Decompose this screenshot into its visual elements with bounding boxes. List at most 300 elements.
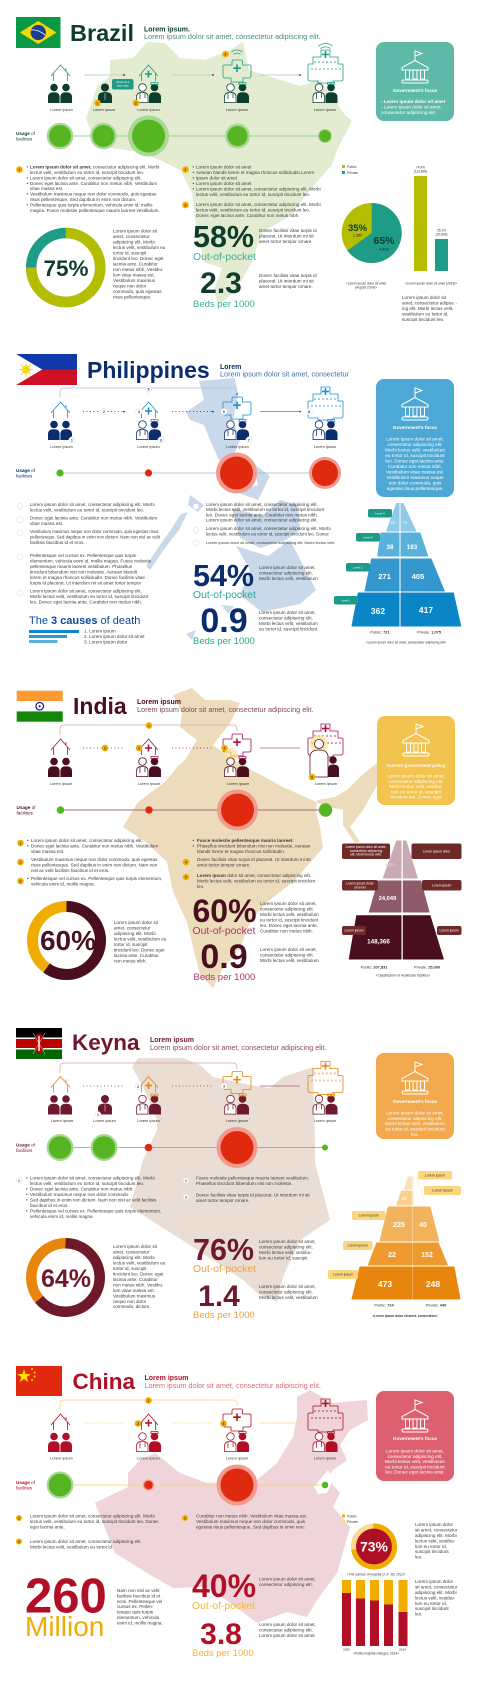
icon labels: Lorem ipsum [137, 107, 160, 112]
text block: notes 4-5: dolor sit amet, consectetur adipiscing elit. [227, 873, 311, 878]
title: Philippines: Philippines [87, 357, 210, 383]
text block: notes 1: Pellentesque vel cursus ex. Pellentesque quis turpis elementum, [30, 1208, 161, 1214]
panel: government focus: Lorem ipsum dolor sit amet, [386, 436, 444, 442]
icon labels: Lorem ipsum [137, 1456, 160, 1460]
text block: notes 6-8: Lorem ipsum dolor sit amet, consectetur adipiscing elit. [206, 518, 318, 522]
text block: notes 6-8: lectus velit, vestibulum eu tortor id, suscipit tincidunt leo. Donec [206, 532, 330, 536]
text: stat notes: Lorem ipsum dolor sit amet, [259, 565, 316, 570]
heading: 3 causes of death: The 3 causes of death [29, 615, 140, 627]
pyramid chart: 417 [419, 605, 433, 615]
panel: government policy: Current government policy [387, 763, 446, 768]
icon labels: Lorem ipsum [314, 444, 336, 449]
text: stat notes: Lorem ipsum dolor sit amet, [259, 1239, 316, 1244]
text block: notes 1-3: 2 [20, 860, 22, 864]
stat: 3.8 beds: Beds per 1000 [192, 1648, 254, 1659]
usage chart [46, 1464, 328, 1506]
pyramid captions [372, 1302, 446, 1318]
text: 260 million note: elementum, vehicula [117, 1615, 160, 1620]
text: donut note: lum vitae massa est. [113, 1288, 155, 1293]
badge numbers: 2 [137, 1085, 139, 1089]
text block: notes 1: • [26, 181, 28, 186]
level tags: Level 3 [363, 536, 373, 540]
text block: notes 2 and 3: Donec eget lacinia ante. Curabitur non metus nibh. [196, 213, 299, 218]
stat: 54%: Out-of-pocket [193, 590, 256, 601]
text block: notes 2 and 3: • [192, 164, 194, 170]
text block: notes 6-8: Lorem ipsum dolor sit amet, consectetur adipiscing elit. Morbi [206, 526, 331, 531]
text block: notes 1: • [26, 1192, 28, 1197]
subtitle: Lorem ipsum dolor sit amet, consectetur adipiscing elit. [144, 32, 320, 41]
text: stat notes: placerat. Ut interdum mi sit [259, 234, 314, 238]
text: stat notes: lum eu tortor id, suscipit [259, 1256, 308, 1260]
panel: government focus: consectetur adipiscing elit. [388, 1116, 442, 1121]
text: stat notes: Morbi lectus velit, vestibulum [260, 958, 319, 963]
text: chart notes: Lorem ipsum dolor [415, 1522, 453, 1527]
badges: 2 [135, 101, 137, 105]
text: stat notes: Donec facilisis vitae turpis id [259, 228, 317, 233]
bar chart: 25.1% [437, 228, 446, 232]
pyramid chart: 362 [371, 606, 385, 616]
text block: note 3: Curabitur non metus nibh. Vestibulum vitae massa est. [196, 1514, 307, 1518]
panel: government focus: - Lorem ipsum dolor sit amet, [381, 104, 442, 110]
pyramid captions: <Lorem ipsum dolor sit amet, consectetur> [372, 1314, 438, 1318]
icon: door-step health worker: door step [117, 84, 129, 88]
panel: government focus: Vestibulum maximus neque [386, 475, 444, 480]
text block: notes 2-3: 3 [185, 1195, 187, 1199]
text: stat notes: Lorem ipsum dolor sit amet, [259, 610, 316, 615]
text: stat notes: Donec facilisis vitae turpis id [259, 273, 317, 278]
panel: government focus: consectetur adipiscing elit [381, 110, 435, 115]
text block: notes 1: • [26, 1198, 28, 1202]
text block: notes 1-3: Lorem ipsum dolor sit amet, consectetur adipiscing elit. [31, 838, 143, 843]
icon: clinic [223, 1409, 251, 1452]
icon: home [48, 1076, 72, 1114]
panel: government focus: leo. Donec eget lacinia ante. [385, 458, 445, 464]
icon labels: Lorem ipsum [314, 1456, 336, 1460]
usage chart [47, 116, 332, 156]
text: stat notes: consectetur adipiscing elit. [259, 1290, 313, 1294]
badge numbers: 7 [248, 438, 250, 442]
text: donut note: adipiscing elit. Morbi [113, 1255, 155, 1260]
text block: notes 6-8: Lorem ipsum dolor sit amet, consectetur adipiscing elit. Morbi lectus velit, [206, 540, 335, 545]
text block: notes 1-5 [17, 502, 161, 604]
text block: notes 2 and 3: 3 [185, 203, 187, 207]
pie chart: 2,380 [353, 234, 362, 238]
icon labels: Lorem ipsum [93, 1118, 116, 1123]
icon labels: Lorem ipsum [138, 781, 160, 786]
text: chart note: vestibulum eu tortor id, [402, 312, 448, 316]
text block: notes 2-3: Donec facilisis vitae turpis id placerat. Ut interdum mi sit [196, 1192, 310, 1198]
pyramid tags: elit. Morbi lectus velit. [350, 853, 382, 857]
text block: notes 1 [16, 1176, 161, 1219]
subtitle: Lorem ipsum [144, 1375, 188, 1382]
badge numbers: 1 [71, 438, 73, 442]
text: chart notes: adipiscing elit. Morbi [415, 1590, 457, 1595]
panel: government focus: Morbi lectus velit, vestibulum [385, 1459, 445, 1464]
title: Brazil: Brazil [70, 20, 134, 46]
pyramid tags: Lorem ipsum [333, 1272, 353, 1276]
text block: notes 1-2: Lorem ipsum dolor sit amet, consectetur adipiscing elit. [30, 1539, 142, 1544]
caption: hospitals: <The number of hospital (J. K. W), 2012> [347, 1572, 405, 1576]
text block: notes 1-5: pellentesque. Sed dapibus in enim non dictum. Nam non nisl ac velit [30, 534, 161, 540]
panel: government focus: Morbi lectus velit, vestibulum [385, 448, 445, 452]
text block: notes 1-3: • [27, 844, 29, 848]
text block: notes 1: Donec eget lacinia ante. Curabitur non metus nibh. [30, 1186, 133, 1192]
text: stat notes: Lorem ipsum dolor sit amet. [259, 1633, 316, 1638]
arrows [84, 74, 301, 76]
text block: notes 6-8: Lorem ipsum dolor sit amet, consectetur adipiscing elit. [206, 502, 318, 507]
text block: notes 1-5: lorem et magna rhoncus sollicitudin. Donec facilisis vitae [30, 575, 145, 580]
text block: notes 6-8: leo. Donec eget lacinia ante. Curabitur non metus nibh. [206, 512, 318, 518]
text block: notes 1-3: 1 [20, 841, 22, 845]
stat: 60%: 60% [192, 893, 257, 929]
title: India: India [73, 693, 127, 719]
map: Philippines [146, 378, 316, 640]
usage of facilities: Usage of [16, 1480, 35, 1485]
map: Brazil [86, 42, 352, 306]
stat: 0.9 beds: Beds per 1000 [193, 636, 255, 647]
usage of facilities: facilities [16, 1486, 33, 1490]
text block: notes 1: vitae massa est. [30, 186, 63, 191]
badges: 5 [311, 775, 313, 779]
stat: 0.9 beds [193, 602, 255, 647]
text block: notes 1-3: Vestibulum maximus neque non dolor commodo, quis egestas [31, 857, 158, 862]
icon labels: Lorem ipsum [50, 107, 73, 112]
text block: notes 1: risus pellentesque. Sed dapibus in enim non dictum. [30, 197, 136, 202]
badge numbers: 1 [97, 1113, 99, 1117]
icon: hospital [308, 1399, 343, 1452]
text block: notes 1: • [26, 202, 28, 208]
text: chart notes: suscipit tincidunt [415, 1549, 449, 1554]
text: donut note: Vestibulum maximus [113, 278, 156, 283]
pyramid chart: 40 [419, 1222, 427, 1229]
text block: notes 1-3: 3 [20, 879, 22, 883]
badges [69, 386, 312, 443]
panel: government focus: eu tortor id, suscipit tincidunt [385, 453, 445, 458]
text: stat notes: Morbi lectus velit, vestibulum [259, 621, 318, 626]
icon labels: Lorem ipsum [93, 107, 115, 112]
icon: home [48, 1414, 72, 1452]
text: donut note: non metus nibh. Vestibu- [113, 1282, 164, 1288]
stat: 260 Million: Million [25, 1611, 104, 1642]
text block: notes 1-3: risus pellentesque. Sed dapibus in enim non dictum. Nam non [31, 862, 158, 868]
text block: notes 2-3: Fusce molestie pellentesque mauris laoreet vestibulum. [196, 1176, 309, 1180]
title: China: China [72, 1369, 135, 1394]
text block: notes 4-5: 4 [185, 860, 187, 864]
text: donut note: neque non dolor [113, 1299, 147, 1304]
text: donut note: commodo, dictum. [113, 1304, 151, 1309]
text: stat notes: leo. Donec eget lacinia ante. [260, 923, 318, 928]
chart captions: <Lorem ipsum dolor sit amet (2014)> [405, 282, 457, 286]
text block: notes 1-3: vehicula enim id, mollis magna. [31, 882, 95, 886]
panel: government focus: Government's focus [393, 1099, 438, 1104]
icon labels: Lorem ipsum [314, 1118, 336, 1123]
icon: clinic [223, 397, 251, 440]
pyramid chart: 50 [390, 520, 396, 525]
text block: notes 2 and 3: lectus velit, vestibulum eu tortor id, suscipit tincidunt leo. [196, 192, 310, 197]
section: Brazil [16, 17, 457, 322]
text block: notes 2 and 3: • [192, 186, 194, 192]
bar chart: (113,893) [414, 170, 427, 174]
arrows [60, 1400, 300, 1423]
text block: notes 4-5: 5 [185, 875, 187, 879]
text block: notes 1: Vestibulum maximus neque non dolor commodo. [30, 1192, 129, 1197]
text: donut note: adipiscing elit. Morbi [113, 240, 155, 244]
badge numbers: 2 [103, 410, 105, 414]
usage of facilities: Usage of [16, 131, 35, 136]
text block: notes 2-3 [183, 1176, 310, 1203]
stat: 58%: Out-of-pocket [193, 252, 256, 263]
text: donut note: tortor id, suscipit [113, 250, 147, 256]
text: chart note: Lorem ipsum dolor sit [402, 295, 446, 300]
panel: government focus: Morbi lectus velit, vestibulum [385, 1121, 445, 1126]
pyramid tags: Lorem ipsum [359, 1214, 379, 1218]
pyramid tags: Lorem ipsum dolor [423, 850, 451, 854]
badges: 1 [97, 101, 99, 105]
text block: notes 1-5: Lorem ipsum dolor sit amet, consectetur adipiscing elit. Morbi [30, 502, 155, 507]
badge numbers: 6 [223, 410, 225, 414]
pyramid captions: Private: 25,000 [414, 964, 440, 970]
text block: notes 2 and 3: Lorem ipsum dolor sit amet [196, 164, 252, 170]
arrows [60, 1063, 300, 1086]
donut: 73% [354, 1526, 394, 1567]
icon labels: Lorem ipsum [226, 1118, 248, 1123]
text block: notes 2 and 3: Lorem ipsum dolor sit amet [196, 181, 252, 186]
pyramid tags: Lorem ipsum [439, 928, 459, 932]
text block: notes 4-5: Morbi lectus velit, vestibulum eu tortor id, suscipit tincidunt [197, 878, 316, 884]
text block: notes 1-3: Donec eget lacinia ante. Curabitur non metus nibh. Vestibulum [31, 844, 158, 848]
icon: door-step worker [98, 1095, 112, 1114]
arrows [60, 725, 300, 748]
usage chart [46, 1127, 328, 1168]
text: donut note: lum vitae massa est. [113, 272, 155, 278]
panel: government focus: Government's focus [393, 88, 438, 93]
text block: notes 1-2: lectus velit, vestibulum eu tortor id, suscipit tincidunt leo. Donec [30, 1519, 159, 1524]
text block: notes 1-5: lectus velit, vestibulum eu tortor id, suscipit tincidunt leo. [30, 508, 144, 512]
flag: Keyna [16, 1028, 62, 1059]
usage of facilities: Usage of [16, 805, 35, 810]
text block: note 3 [182, 1514, 307, 1530]
icon labels [51, 1118, 336, 1123]
text block: notes 1: magna. Fusce molestie pellentesque mauris laoreet vestibulum. [30, 208, 160, 213]
text: stat notes: Morbi lectus velit, vestibulum [260, 912, 319, 917]
text: 260 million note: eros. Pellentesque vel [117, 1599, 162, 1604]
legend: Public [347, 1514, 357, 1518]
text block: notes 1: Vestibulum maximus neque non dolor commodo, quis egestas [30, 192, 157, 196]
icon: clinic house [136, 739, 161, 777]
pyramid chart: 148,366 [367, 938, 390, 946]
pyramid chart: 271 [378, 572, 391, 581]
usage of facilities: Usage of [16, 468, 35, 473]
icon: home [48, 65, 72, 103]
stat: 40%: 40% [192, 1568, 256, 1604]
pyramid tags: Lorem ipsum dolor [346, 882, 375, 886]
text block: notes 2-3: amet tortor tempor ornare. [196, 1198, 250, 1203]
stacked bar chart: <Public hospital changes, 2014> [353, 1652, 399, 1656]
pyramid tags: sit amet [354, 885, 366, 889]
text block: notes 1-5: Donec eget lacinia ante. Curabitur non metus nibh. Vestibulum [30, 516, 157, 520]
stat: 60%: Out-of-pocket [192, 926, 256, 937]
panel: government focus: egestas risus pellentesque. [387, 486, 443, 491]
pyramid chart: 70 [402, 520, 408, 525]
text: donut note: risus pellentesque. [113, 294, 151, 300]
text: chart notes: lectus velit, vestibu- [415, 1538, 456, 1544]
chart captions: <Lorem ipsum dolor sit amet [346, 282, 386, 286]
text block: notes 4-5: Donec facilisis vitae turpis id placerat. Ut interdum mi sit [197, 857, 311, 862]
panel: government focus: Lorem ipsum dolor sit amet, [386, 1110, 444, 1116]
causes bars [29, 628, 145, 644]
text: chart notes: adipiscing elit. Morbi [415, 1533, 457, 1538]
text block: notes 1-5: Morbi lectus velit, vestibulum eu tortor id, suscipit tincidunt [30, 594, 149, 599]
icon: door-step health worker: Serve at a [116, 80, 130, 84]
text: stat notes: Lorem ipsum dolor sit amet, [260, 947, 317, 952]
flag: Philippines [16, 354, 77, 385]
text block: notes 1-2: Morbi lectus velit, vestibulum eu tortor id. [30, 1544, 113, 1550]
badge numbers: 3 [223, 1084, 225, 1088]
icon: hospital [308, 1062, 343, 1114]
text: chart notes: lectus velit, vestibu- [415, 1596, 456, 1600]
text block: notes 1-5: elementum, vehicula enim id, mollis magna. Fusce molestie [30, 558, 152, 564]
icon: home [48, 739, 72, 777]
icon: clinic house [136, 1414, 161, 1452]
text: donut note: lacinia ante. Curabitur [113, 262, 158, 266]
text: stat notes: consectetur adipiscing elit. [259, 1244, 313, 1250]
text block: notes 2 and 3: 2 [185, 168, 187, 172]
text: stat notes: consectetur adipiscing elit. [260, 906, 314, 912]
panel: government focus: Government's focus [393, 1436, 438, 1441]
panel: government policy: Lorem ipsum dolor sit amet, [387, 774, 445, 778]
text: donut note: non metus nibh. [114, 958, 147, 964]
text block: notes 1: Lorem ipsum dolor sit amet, [30, 164, 92, 170]
text: chart note: suscipit tincidunt leo. [402, 317, 444, 322]
text: donut note: amet, consectetur [113, 234, 150, 239]
text block: notes 1-5: Vestibulum maximus neque non dolor commodo, quis egestas risus [30, 529, 158, 534]
icon labels: Lorem ipsum [137, 1118, 160, 1123]
pyramid chart: 225 [393, 1222, 405, 1229]
usage of facilities: facilities [16, 810, 34, 816]
stat: 1.4 beds: Beds per 1000 [193, 1310, 255, 1321]
causes bars: 3. Lorem ipsum dolor [84, 640, 128, 644]
subtitle: Lorem ipsum [137, 699, 181, 706]
map: India [123, 688, 380, 988]
text: stat notes: eu tortor id, suscipit tincidunt [260, 918, 319, 922]
text block: notes 2-3: Phasellus tincidunt bibendum nisi non molestie. [196, 1181, 293, 1186]
panel: government policy: consectetur adipiscing elit. [389, 779, 443, 784]
subtitle: Lorem ipsum. [144, 26, 190, 34]
text: donut note: amet, consectetur [113, 1250, 150, 1254]
text: stat notes: consectetur adipiscing elit. [259, 570, 313, 576]
stat: 2.3 beds [193, 267, 255, 310]
text block: notes 6-8: Morbi lectus velit, vestibulum eu tortor id, suscipit tincidunt [206, 507, 325, 512]
usage of facilities: facilities [16, 474, 33, 478]
stacked bar chart: 2014 [399, 1648, 406, 1652]
legend: Private [347, 171, 358, 175]
text block: notes 1: 1 [19, 168, 21, 172]
panel: government policy [377, 716, 455, 805]
pyramid chart: 248 [426, 1279, 440, 1289]
badges [94, 51, 229, 106]
text block: notes 1: 1 [18, 1179, 20, 1183]
icon labels: Lorem ipsum [226, 444, 249, 449]
panel: government focus: Lorem ipsum dolor sit amet, [386, 1448, 444, 1454]
usage of facilities: facilities [16, 1148, 33, 1153]
text: donut note: amet, consectetur [114, 926, 151, 930]
icon labels: Lorem ipsum [226, 107, 248, 112]
text: chart note: amet, consectetur adipisc - [402, 300, 457, 306]
stat: 58%: 58% [193, 220, 254, 254]
flag: India [17, 691, 63, 722]
text block: notes 1-2: Lorem ipsum dolor sit amet, consectetur adipiscing elit. Morbi [30, 1514, 155, 1518]
stat: 40%: Out-of-pocket [192, 1601, 255, 1612]
text: stat notes: Morbi lectus velit, vestibulum [259, 576, 318, 581]
panel: government focus [376, 1391, 454, 1481]
text block: notes 2-3: 2 [185, 1179, 187, 1183]
pyramid chart [352, 1177, 460, 1299]
stat: 0.9 beds: 0.9 [200, 938, 248, 976]
title: Keyna: Keyna [72, 1030, 140, 1055]
pyramid tags: Lorem ipsum [432, 884, 451, 888]
stat: 2.3 beds: Beds per 1000 [193, 299, 255, 310]
text block: notes 1-2: 1 [18, 1516, 20, 1520]
section: China [16, 1366, 458, 1659]
text: stat notes: Lorem ipsum dolor sit amet, [259, 1576, 316, 1582]
level tags [334, 509, 392, 604]
badges: 2 [104, 746, 106, 750]
usage chart [57, 790, 332, 830]
text: donut note: lectus velit, vestibulum eu [113, 1260, 166, 1266]
causes bars: 1. Lorem ipsum [84, 628, 116, 634]
map: China [95, 1390, 368, 1623]
subtitle: Lorem ipsum dolor sit amet, consectetur adipiscing elit. [150, 1043, 326, 1052]
stat: 3.8 beds [192, 1618, 254, 1659]
text block: notes 1: Donec eget lacinia ante. Curabitur non metus nibh. Vestibulum [30, 181, 157, 186]
pyramid chart: 405 [412, 572, 424, 581]
text: stat notes: eu tortor id, suscipit tincidunt [259, 626, 318, 632]
pyramid captions [361, 964, 440, 978]
subtitle: Lorem ipsum dolor sit amet, consectetur adipiscing elit. [144, 1381, 321, 1390]
icon: home [48, 402, 72, 440]
icon: clinic [223, 50, 251, 103]
section: Keyna [16, 1028, 461, 1321]
chart captions: (August 2014)> [355, 286, 377, 290]
text: chart notes: lum eu tortor id, [415, 1601, 447, 1606]
usage of facilities: Usage of [16, 1142, 35, 1148]
text block: notes 1: consectetur adipiscing elit. Morbi [93, 164, 159, 170]
text block: notes 1: Sed dapibus in enim non dictum. Nam non nisl ac velit facilisis [30, 1198, 157, 1202]
badges: 2 [137, 1422, 139, 1426]
badges: 1 [148, 724, 150, 728]
text: stat notes: Lorem ipsum dolor sit amet, [259, 1284, 316, 1289]
donut: 64% [31, 1243, 100, 1312]
badges: 3 [223, 1422, 225, 1426]
stat: 3.8 beds: 3.8 [200, 1618, 242, 1651]
icon labels: Lorem ipsum [50, 1456, 73, 1460]
stat: 1.4 beds [193, 1280, 255, 1321]
text block: notes 6-8 [193, 502, 335, 546]
badge numbers [97, 1084, 225, 1117]
text block: note 3: 3 [184, 1516, 186, 1520]
text: stat notes: consectetur adipiscing elit. [259, 1582, 313, 1587]
text block: notes 1-3 [17, 838, 162, 886]
legend [342, 1514, 358, 1524]
text block: notes 1-2 [16, 1514, 159, 1550]
pyramid tags [328, 1171, 461, 1279]
subtitle: Lorem ipsum dolor sit amet, consectetur [220, 370, 350, 378]
text block: notes 4-5 [183, 838, 316, 889]
donut: 75%: 75% [43, 256, 89, 281]
stat: 76%: 76% [193, 1233, 254, 1267]
usage chart [56, 452, 341, 494]
legend: Private [347, 1520, 358, 1524]
